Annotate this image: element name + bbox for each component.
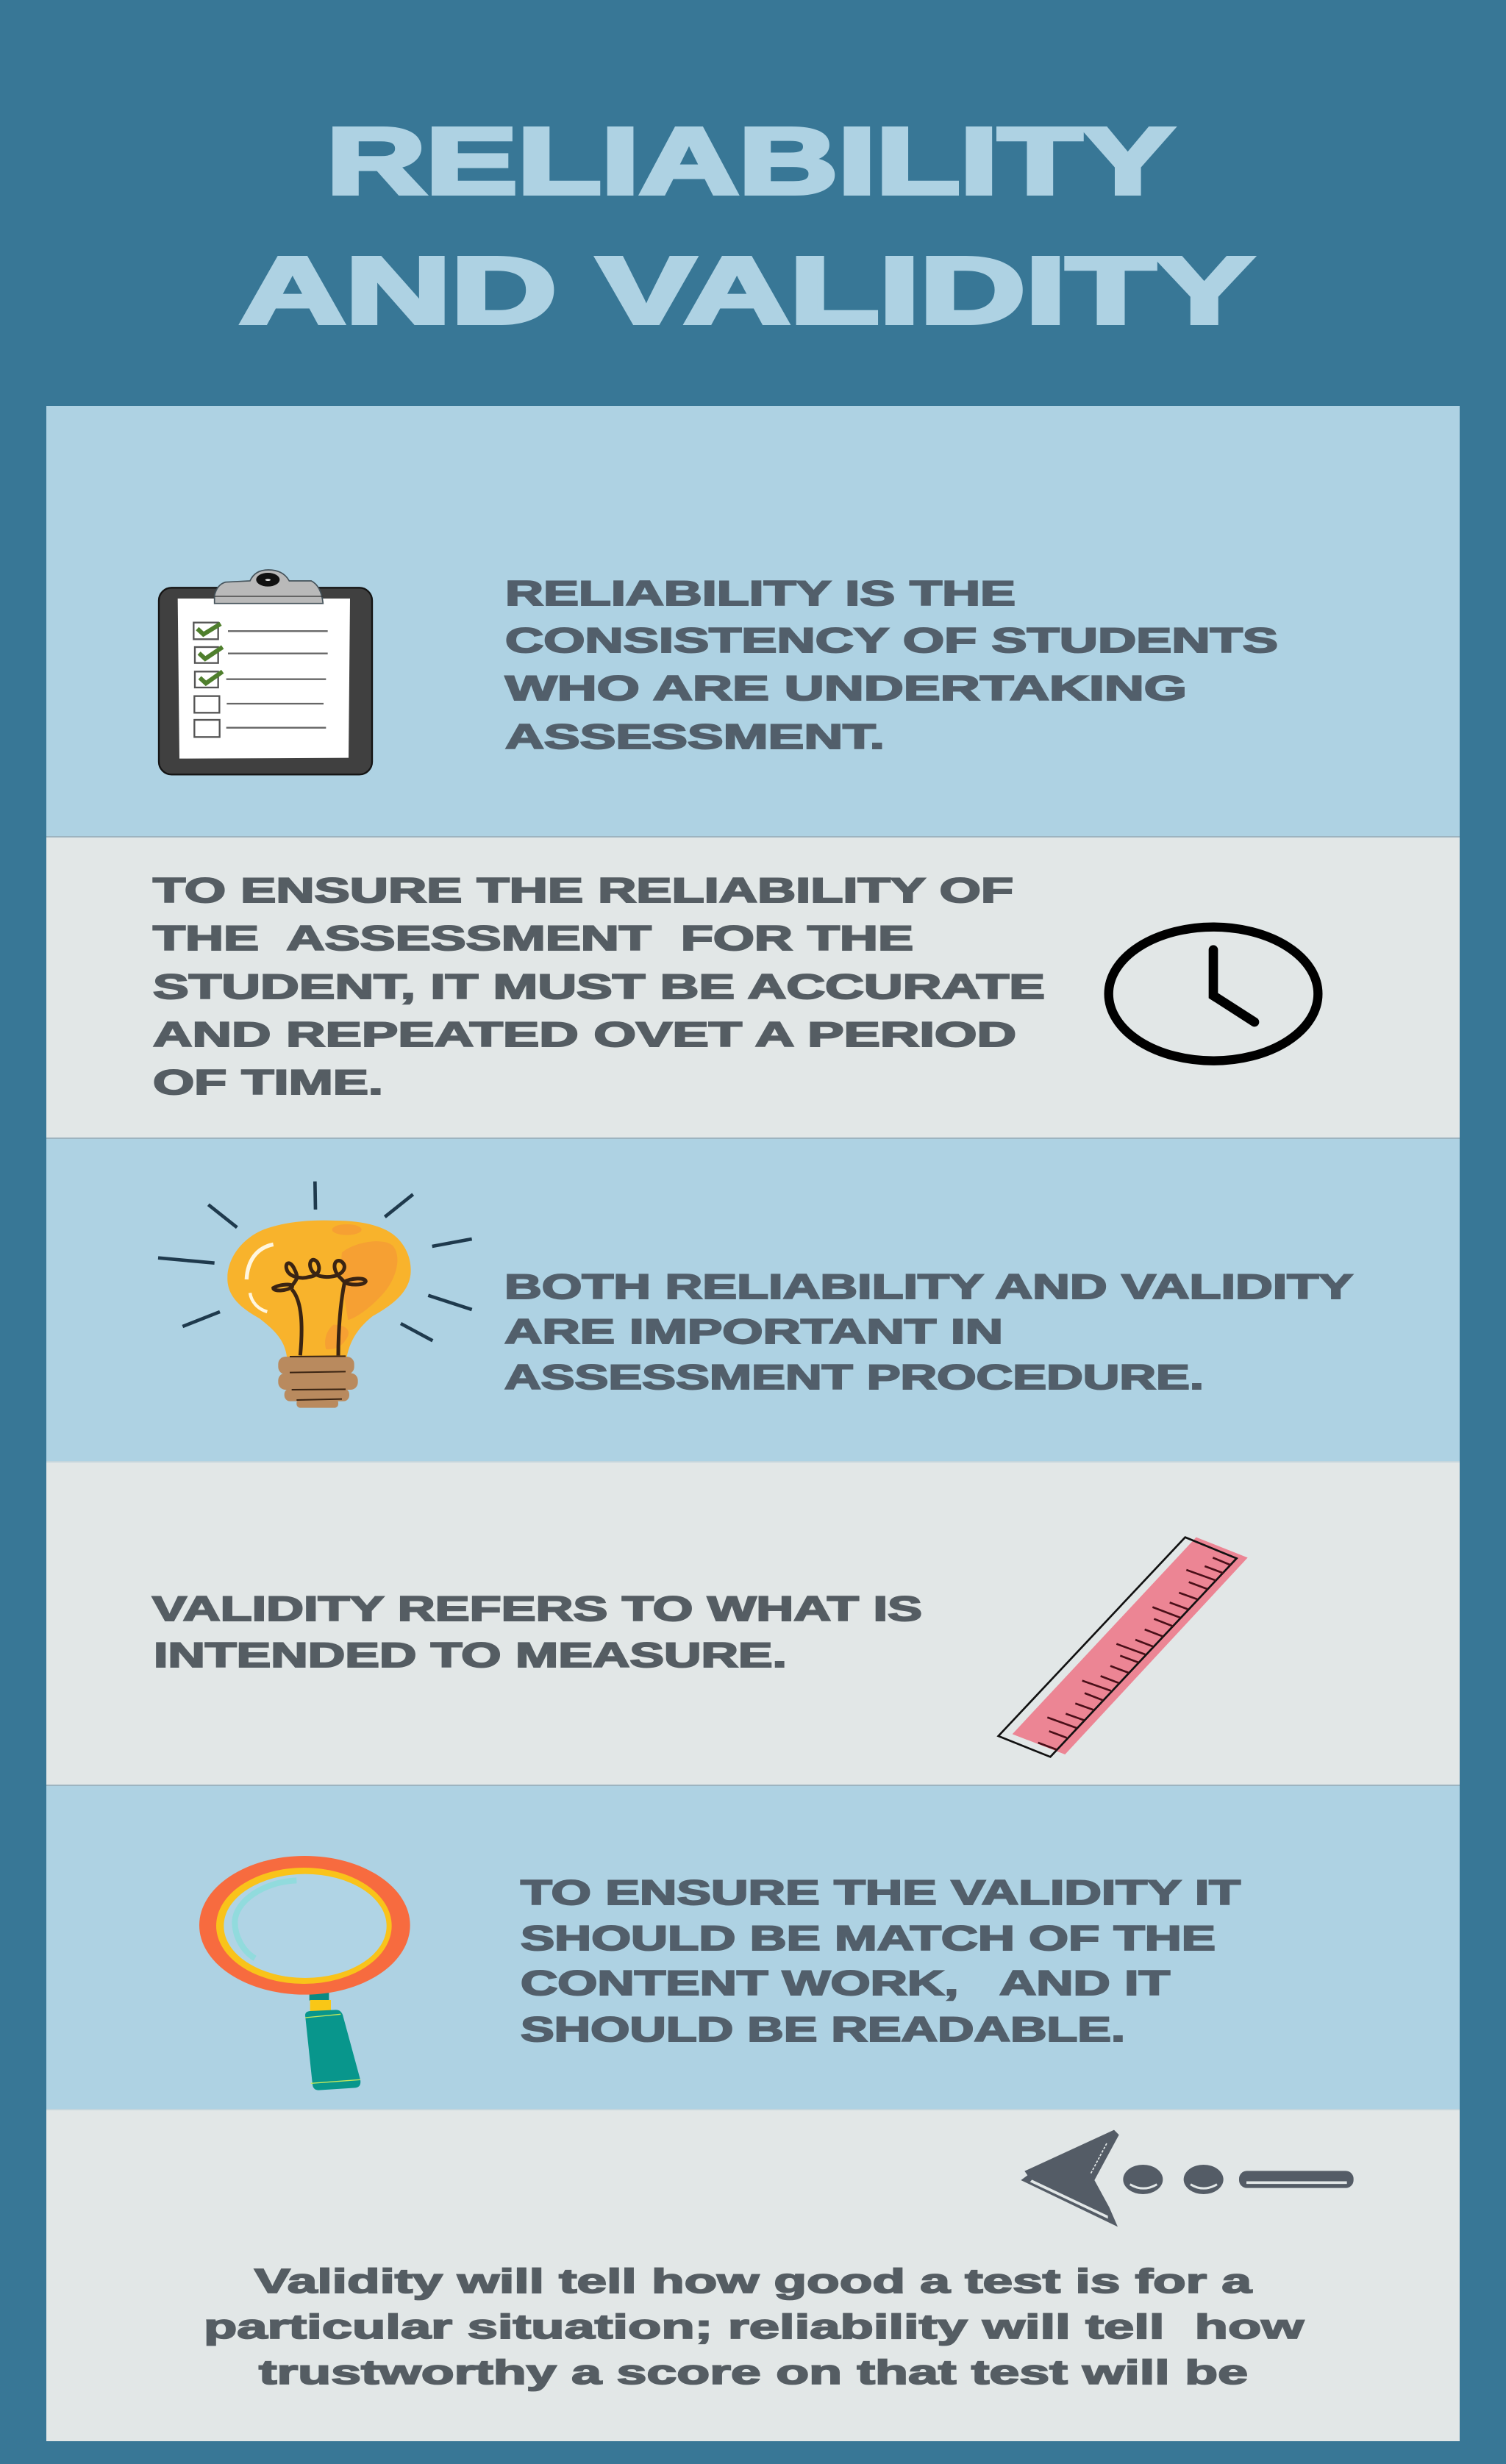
text: summary: trustworthy a score on that test will be: [259, 2353, 1248, 2391]
panel: ensuring reliability: [46, 837, 1460, 1138]
text: reliability definition: WHO ARE UNDERTAKING: [505, 668, 1187, 707]
panel: validity definition: [46, 1462, 1460, 1785]
icon: clipboard: [159, 570, 372, 774]
text: reliability definition: CONSISTENCY OF STUDENTS: [505, 621, 1278, 660]
text: summary: Validity will tell how good a test is for a: [254, 2262, 1252, 2300]
text: reliability definition: [505, 574, 1278, 756]
panel: summary: [46, 2110, 1460, 2441]
text: ensuring validity: CONTENT WORK, AND IT: [521, 1963, 1170, 2002]
text: ensuring reliability: STUDENT, IT MUST BE ACCURATE: [153, 967, 1045, 1006]
icon: magnifying glass: [199, 1856, 410, 2090]
text: ensuring reliability: AND REPEATED OVET A PERIOD: [153, 1015, 1016, 1054]
text: validity definition: VALIDITY REFERS TO WHAT IS: [152, 1589, 922, 1628]
text: validity definition: [152, 1589, 922, 1674]
text: summary: particular situation; reliability will tell how: [204, 2307, 1304, 2346]
text: both important: ASSESSMENT PROCEDURE.: [504, 1357, 1204, 1396]
title: [240, 109, 1253, 343]
text: ensuring validity: TO ENSURE THE VALIDITY IT: [521, 1873, 1241, 1912]
title: RELIABILITY: [326, 109, 1174, 214]
text: ensuring validity: [521, 1873, 1241, 2049]
text: ensuring validity: SHOULD BE MATCH OF THE: [521, 1918, 1216, 1957]
text: ensuring reliability: [153, 871, 1045, 1101]
text: validity definition: INTENDED TO MEASURE.: [154, 1635, 787, 1674]
icon: light bulb: [158, 1182, 472, 1408]
icon: ruler: [999, 1538, 1248, 1757]
text: ensuring reliability: THE ASSESSMENT FOR THE: [153, 918, 913, 957]
panel: ensuring validity: [46, 1785, 1460, 2110]
text: reliability definition: RELIABILITY IS THE: [505, 574, 1016, 613]
text: both important: BOTH RELIABILITY AND VALIDITY: [504, 1267, 1353, 1306]
text: reliability definition: ASSESSMENT.: [505, 717, 885, 756]
text: summary: [204, 2262, 1304, 2391]
text: ensuring reliability: TO ENSURE THE RELIABILITY OF: [153, 871, 1013, 910]
arrow: pointing left with dots and dash: [1021, 2130, 1354, 2226]
text: both important: [504, 1267, 1353, 1396]
text: ensuring validity: SHOULD BE READABLE.: [521, 2010, 1125, 2049]
panel: both important: [46, 1138, 1460, 1462]
panel: reliability definition: [46, 406, 1460, 837]
icon: clock: [1109, 927, 1318, 1061]
text: both important: ARE IMPORTANT IN: [504, 1312, 1003, 1351]
title: AND VALIDITY: [240, 238, 1253, 343]
text: ensuring reliability: OF TIME.: [153, 1063, 383, 1101]
